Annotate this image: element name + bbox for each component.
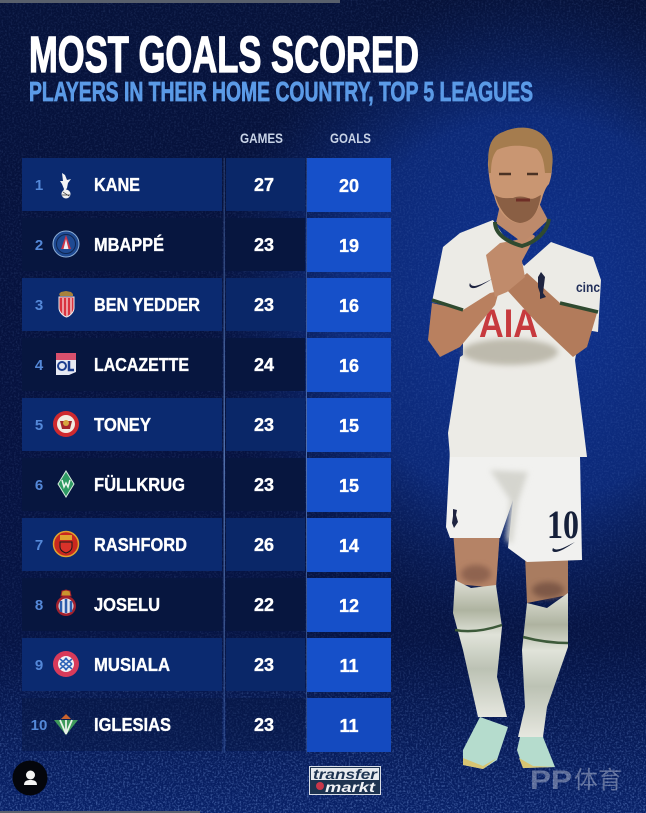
- row 9: Musiala: MUSIALA: [94, 655, 170, 675]
- profile icon: [12, 760, 48, 796]
- watermark: [530, 765, 622, 795]
- shirt dirt patch: [462, 339, 558, 365]
- row 2: Mbappe: [22, 218, 391, 272]
- icon: PSG crest: [53, 231, 79, 257]
- row 8: Joselu: [22, 578, 391, 632]
- row 4: Lacazette: [22, 338, 391, 392]
- icon: Brentford crest: [53, 411, 79, 437]
- column header: goals: GOALS: [330, 131, 371, 146]
- shirt sponsor AIA: AIA: [479, 302, 538, 346]
- row 8: Joselu: 8: [35, 597, 43, 614]
- row 7: Rashford: 26: [254, 535, 274, 555]
- icon: Bayern Munich crest: [53, 651, 79, 677]
- collar: [495, 219, 549, 246]
- icon: Monaco crest: [59, 291, 74, 317]
- left boot: [463, 717, 508, 769]
- row 3: Ben Yedder: 3: [35, 297, 43, 314]
- right forearm: [507, 273, 597, 357]
- short crest: [452, 509, 458, 528]
- row 7: Rashford: 14: [339, 536, 359, 556]
- transfermarkt logo: markt: [325, 779, 377, 795]
- row 1: Kane: 1: [35, 177, 43, 194]
- title: MOST GOALS SCORED: [29, 26, 419, 83]
- row 10: Iglesias: 11: [339, 716, 359, 736]
- sock bands: [455, 625, 568, 643]
- player figure: Harry Kane: [428, 128, 601, 769]
- sleeve bands: [432, 300, 598, 312]
- row 6: Fullkrug: 6: [35, 477, 43, 494]
- head: [488, 135, 552, 223]
- row 3: Ben Yedder: BEN YEDDER: [94, 295, 200, 315]
- left sock: [453, 580, 507, 717]
- icon: Tottenham crest: [60, 173, 71, 198]
- row 10: Iglesias: IGLESIAS: [94, 715, 171, 735]
- row 4: Lacazette: 16: [339, 356, 359, 376]
- left leg: [453, 530, 500, 588]
- row 6: Fullkrug: 15: [339, 476, 359, 496]
- row 10: Iglesias: 10: [31, 717, 47, 734]
- row 8: Joselu: JOSELU: [94, 595, 160, 615]
- row 3: Ben Yedder: [22, 278, 391, 332]
- icon: Werder Bremen crest: [58, 471, 74, 497]
- row 8: Joselu: 22: [254, 595, 274, 615]
- transfermarkt logo: [310, 766, 380, 795]
- nike swoosh: [469, 279, 492, 288]
- row 3: Ben Yedder: 16: [339, 296, 359, 316]
- row 1: Kane: 20: [339, 176, 359, 196]
- row 4: Lacazette: 4: [35, 357, 44, 374]
- row 5: Toney: 23: [254, 415, 274, 435]
- row 10: Iglesias: 23: [254, 715, 274, 735]
- row 5: Toney: [22, 398, 391, 452]
- icon: Manchester United crest: [54, 532, 78, 556]
- row 7: Rashford: RASHFORD: [94, 535, 187, 555]
- hair: [488, 128, 553, 173]
- row 7: Rashford: [22, 518, 391, 572]
- row 7: Rashford: 7: [35, 537, 43, 554]
- left forearm: [428, 291, 499, 357]
- row 3: Ben Yedder: 23: [254, 295, 274, 315]
- row 10: Iglesias: [22, 698, 391, 752]
- row 2: Mbappe: MBAPPÉ: [94, 234, 164, 255]
- eyes, nose and mouth: [499, 173, 538, 175]
- shorts number 10: 10: [547, 502, 579, 547]
- watermark: PP: [530, 765, 572, 795]
- row 9: Musiala: [22, 638, 391, 692]
- right leg: [525, 555, 568, 603]
- row 2: Mbappe: 2: [35, 237, 43, 254]
- row 9: Musiala: 23: [254, 655, 274, 675]
- icon: Real Betis crest: [54, 714, 78, 735]
- shirt crest: [538, 272, 546, 299]
- shirt body: [432, 220, 601, 457]
- right boot: [517, 737, 555, 768]
- neck: [496, 205, 548, 243]
- row 5: Toney: 5: [35, 417, 43, 434]
- row 1: Kane: [22, 158, 391, 212]
- row 9: Musiala: 11: [339, 656, 359, 676]
- row 5: Toney: TONEY: [94, 415, 151, 435]
- table of players: [22, 158, 391, 753]
- beard: [495, 195, 541, 223]
- shorts swoosh: [552, 542, 575, 552]
- row 8: Joselu: 12: [339, 596, 359, 616]
- transfermarkt logo: transfer: [313, 766, 379, 782]
- sleeve sponsor: cinc: [576, 279, 600, 295]
- row 2: Mbappe: 19: [339, 236, 359, 256]
- row 4: Lacazette: LACAZETTE: [94, 355, 189, 375]
- row 1: Kane: KANE: [94, 175, 140, 195]
- row 6: Fullkrug: FÜLLKRUG: [94, 475, 185, 495]
- column header: games: GAMES: [240, 131, 283, 146]
- right sock: [518, 593, 568, 737]
- row 6: Fullkrug: 23: [254, 475, 274, 495]
- icon: Lyon crest: [56, 353, 76, 375]
- row 5: Toney: 15: [339, 416, 359, 436]
- row 1: Kane: 27: [254, 175, 274, 195]
- watermark: 体育: [574, 767, 622, 794]
- clapping hands: [486, 234, 535, 297]
- row 2: Mbappe: 23: [254, 235, 274, 255]
- row 6: Fullkrug: [22, 458, 391, 512]
- icon: Espanyol crest: [56, 590, 76, 616]
- row 4: Lacazette: 24: [254, 355, 274, 375]
- row 9: Musiala: 9: [35, 657, 43, 674]
- shorts: [446, 450, 582, 562]
